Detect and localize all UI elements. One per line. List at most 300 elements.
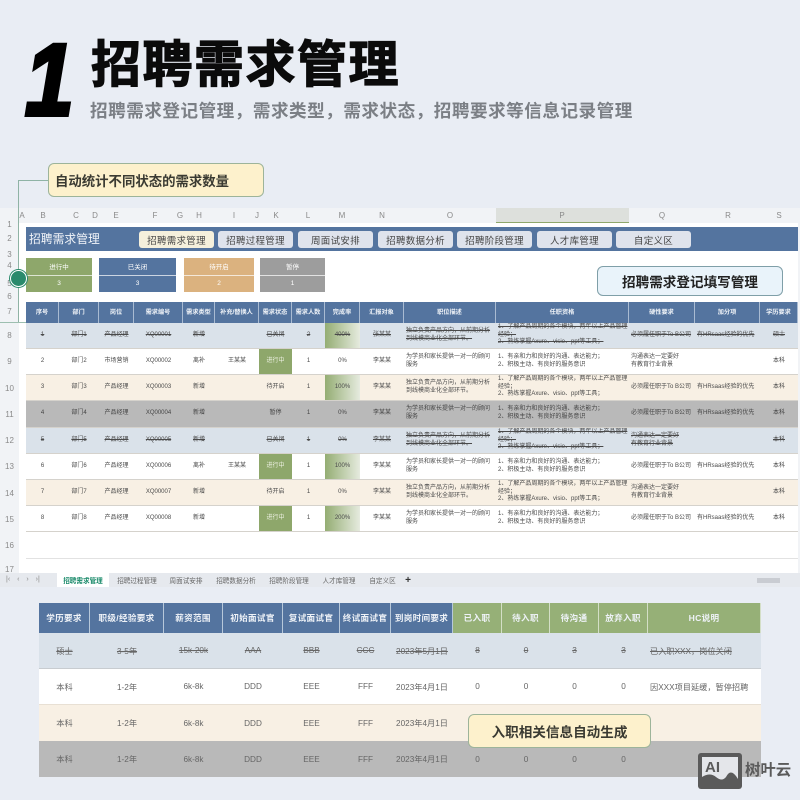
lower row 3: EEE: [303, 718, 320, 728]
row 7: 1、了解产品周期的各个模块，两年以上产品管理: [498, 481, 627, 487]
row 2: 1: [307, 358, 310, 364]
text: A: [19, 211, 25, 220]
row 3: 100%: [335, 384, 350, 390]
main table header: 序号: [36, 309, 48, 316]
row 5: 1: [307, 437, 310, 443]
row 3: 1: [307, 384, 310, 390]
row 2: 0%: [338, 358, 347, 364]
row 7: 0%: [338, 489, 347, 495]
stat card: closed: 3: [136, 280, 139, 287]
tab navigation arrows: |‹ ‹ › ›|: [6, 576, 40, 583]
text: H: [196, 211, 202, 220]
row 8: 必须履任职于To B公司: [631, 515, 691, 521]
lower row 2: [39, 669, 761, 705]
lower row 4: 6k-8k: [183, 754, 204, 764]
add tab icon: +: [405, 574, 411, 586]
text: 15: [5, 515, 14, 524]
row 6: 必须履任职于To B公司: [631, 463, 691, 469]
row 3: 产品经理: [104, 384, 128, 390]
row 1: 产品经理: [104, 332, 128, 338]
row 5: 新增: [193, 437, 205, 443]
row 1: 部门1: [71, 332, 87, 338]
connector bottom line: [0, 322, 26, 323]
lower row 3: 2023年4月1日: [396, 719, 448, 728]
row 7: 沟通表达一定要好: [631, 485, 679, 491]
main table header: 需求编号: [146, 309, 170, 316]
lower row 2: 因XXX项目延缓，暂停招聘: [650, 682, 748, 692]
numeral 1: 1: [25, 23, 74, 137]
lower row 1: 硕士: [56, 646, 73, 656]
text: N: [379, 211, 385, 220]
row 1: 新增: [193, 332, 205, 338]
lower row 4: EEE: [303, 754, 320, 764]
callout: onboarding info: 入职相关信息自动生成: [492, 725, 627, 740]
row 4: 0%: [338, 410, 347, 416]
row 6: 1: [307, 463, 310, 469]
row 5: 李某某: [373, 437, 391, 443]
main table header: 任职资格: [550, 309, 574, 316]
callout: registration: 招聘需求登记填写管理: [622, 275, 758, 290]
icon: AI picture: AI: [705, 759, 720, 776]
lower row 4: FFF: [358, 754, 373, 764]
stat card: pending: 2: [217, 280, 221, 287]
row 8: 服务: [406, 519, 418, 525]
row 3: 本科: [773, 384, 785, 390]
text: 9: [7, 357, 12, 366]
row 5: 0%: [338, 437, 347, 443]
row 5: 已关闭: [266, 437, 284, 443]
row 2: 为学员和家长提供一对一的顾问: [406, 354, 490, 360]
row 4: 4: [41, 410, 44, 416]
row 8: 李某某: [373, 515, 391, 521]
lower row 4: 0: [524, 754, 528, 764]
row 7: 1: [307, 489, 310, 495]
row 6: 2、积极主动、有良好的服务意识: [498, 467, 585, 473]
lower table header: 到岗时间要求: [395, 613, 448, 623]
text: M: [339, 211, 345, 220]
main table header: [26, 302, 798, 323]
sheet background: [19, 223, 798, 573]
row 3: 待开启: [266, 384, 284, 390]
row 6: XQ00006: [146, 463, 171, 469]
row 8: XQ00008: [146, 515, 171, 521]
lower row 1: 2023年5月1日: [396, 646, 448, 656]
lower row 2: 0: [621, 682, 626, 691]
row 8: 新增: [193, 515, 205, 521]
lower row 4: 0: [475, 754, 480, 764]
lower row 2: 2023年4月1日: [396, 682, 448, 692]
row 2: 李某某: [373, 358, 391, 364]
text: L: [306, 211, 310, 220]
row 4: XQ00004: [146, 410, 171, 416]
main table header: 岗位: [110, 309, 122, 316]
row 3: 独立负责产品方向，从前期分析: [406, 380, 490, 386]
row 6: 服务: [406, 467, 418, 473]
text: Q: [659, 211, 665, 220]
lower row 2: 0: [572, 682, 577, 691]
active tab: [57, 573, 109, 587]
watermark logo: [698, 753, 791, 789]
row 6: 6: [41, 463, 44, 469]
text: S: [776, 211, 782, 220]
lower table header: 初始面试官: [230, 613, 275, 623]
row 5: 本科: [773, 437, 785, 443]
active tab: 招聘需求管理: [63, 578, 103, 585]
row 4: 本科: [773, 410, 785, 416]
title: 招聘需求管理: [91, 37, 400, 93]
sheet title: 招聘需求管理: [29, 232, 100, 246]
row 7: 部门7: [71, 489, 87, 495]
lower row 3: 0: [572, 718, 577, 728]
row 1: [26, 323, 798, 349]
marker dot: [10, 270, 27, 287]
row 6: 为学员和家长提供一对一的顾问: [406, 459, 490, 465]
row 8: 本科: [773, 515, 785, 521]
brand name: 树叶云: [745, 762, 791, 779]
stat card: closed: 已关闭: [128, 264, 147, 271]
nav button: 周面试安排: [311, 236, 360, 246]
callout: auto stats: 自动统计不同状态的需求数量: [55, 174, 229, 189]
row 2: 2: [41, 358, 44, 364]
row 2: 本科: [773, 358, 785, 364]
row 4: 1: [307, 410, 310, 416]
text: 6: [7, 292, 12, 301]
row 3: 部门3: [71, 384, 87, 390]
stat card: pending: [184, 258, 254, 292]
main table header: 硬性要求: [649, 309, 674, 316]
text: 14: [5, 489, 14, 498]
row 3: 2、熟练掌握Axure、visio、ppt等工具；: [498, 391, 603, 397]
row 4: 2、积极主动、有良好的服务意识: [498, 414, 585, 420]
nav button: [616, 231, 691, 248]
text: R: [725, 211, 731, 220]
row 8: 部门8: [71, 515, 87, 521]
text: I: [233, 211, 235, 220]
nav button: [457, 231, 532, 248]
row 5: 5: [41, 437, 44, 443]
row 3: [26, 375, 798, 401]
lower table header: 终试面试官: [343, 613, 387, 623]
lower row 3: 0: [524, 718, 528, 728]
row 4: 部门4: [71, 410, 87, 416]
row 2: XQ00002: [146, 358, 171, 364]
row 3: 新增: [193, 384, 205, 390]
lower row 1: BBB: [303, 646, 320, 655]
row 4: 产品经理: [104, 410, 128, 416]
spreadsheet panel: [0, 208, 800, 587]
row 3: 必须履任职于To B公司: [631, 384, 691, 390]
text: 12: [5, 436, 14, 445]
row 6: 部门6: [71, 463, 87, 469]
text: 8: [7, 331, 12, 340]
row 6: 有HRsaas经验的优先: [697, 463, 754, 469]
lower row 1: 3: [621, 646, 626, 655]
lower row 3: 0: [475, 718, 480, 728]
row 4: [26, 401, 798, 428]
stat card: paused: 暂停: [286, 264, 299, 271]
row 3: 李某某: [373, 384, 391, 390]
row 7: 李某某: [373, 489, 391, 495]
row 4: 为学员和家长提供一对一的顾问: [406, 406, 490, 412]
row 1: 1: [41, 332, 44, 338]
lower table header: 职级/经验要求: [98, 613, 155, 623]
row 4: 暂停: [269, 410, 282, 416]
lower row 4: 0: [572, 754, 577, 764]
text: 5: [7, 279, 12, 288]
text: J: [255, 211, 259, 220]
lower row 2: 1-2年: [117, 682, 137, 692]
row 1: 1、了解产品周期的各个模块，两年以上产品管理: [498, 324, 627, 330]
row 6: 本科: [773, 463, 785, 469]
nav button: [537, 231, 612, 248]
text: C: [73, 211, 79, 220]
lower table header: 学历要求: [46, 613, 82, 623]
row 6: 100%: [335, 463, 350, 469]
subtitle: 招聘需求登记管理，需求类型，需求状态，招聘要求等信息记录管理: [90, 101, 633, 121]
row 1: 400%: [335, 332, 350, 338]
row 1: 必须履任职于To B公司: [631, 332, 691, 338]
lower table header: 待沟通: [561, 613, 587, 623]
nav button: [218, 231, 293, 248]
row 2: 服务: [406, 362, 418, 368]
text: 2: [7, 234, 12, 243]
nav button active: [139, 231, 214, 248]
lower row 1: AAA: [245, 646, 261, 655]
row 8: 8: [41, 515, 44, 521]
row 8: 200%: [335, 515, 350, 521]
row 8: 为学员和家长提供一对一的顾问: [406, 511, 490, 517]
stat card: paused: [260, 258, 325, 292]
row 5: 沟通表达一定要好: [631, 433, 679, 439]
text: 3: [7, 250, 12, 259]
text: 1: [7, 220, 12, 229]
row 3: 3: [41, 384, 44, 390]
row 3: XQ00003: [146, 384, 171, 390]
row 7: 经验；: [498, 489, 516, 495]
row 7: 产品经理: [104, 489, 128, 495]
text: 17: [5, 565, 14, 574]
row 3: 有HRsaas经验的优先: [697, 384, 754, 390]
row 7: 有教育行业背景: [631, 493, 673, 499]
text: D: [92, 211, 98, 220]
scrollbar: [757, 578, 780, 583]
tab: 人才库管理: [323, 578, 355, 585]
row 7: 2、熟练掌握Axure、visio、ppt等工具；: [498, 496, 603, 502]
row 1: 经验；: [498, 332, 516, 338]
row 4: 1、有亲和力和良好的沟通、表达能力；: [498, 406, 603, 412]
lower row 1: CCC: [357, 646, 374, 655]
stat card: in progress: 3: [57, 280, 61, 287]
lower row 3: 1-2年: [117, 719, 137, 728]
row 8: 有HRsaas经验的优先: [697, 515, 754, 521]
main table header: 部门: [72, 309, 85, 316]
tab: 自定义区: [369, 578, 396, 585]
row 6: 1、有亲和力和良好的沟通、表达能力；: [498, 459, 603, 465]
row 6: [26, 454, 798, 480]
lower row 3: 6k-8k: [183, 718, 204, 728]
stat card: paused: 1: [291, 280, 294, 287]
row 8: 1、有亲和力和良好的沟通、表达能力；: [498, 511, 603, 517]
text: 16: [5, 541, 14, 550]
nav button: 招聘过程管理: [226, 236, 285, 246]
lower row 2: 6k-8k: [183, 682, 204, 691]
lower row 1: 3: [572, 646, 577, 655]
main table header: 职位描述: [437, 309, 462, 316]
nav button: [298, 231, 373, 248]
text: F: [153, 211, 157, 220]
row 8: 产品经理: [104, 515, 128, 521]
row 3: 经验；: [498, 384, 516, 390]
lower row 4: 2023年4月1日: [396, 755, 448, 764]
lower table header: 已入职: [464, 613, 490, 623]
lower row 1: 已入职XXX，岗位关闭: [650, 646, 732, 656]
row 4: 李某某: [373, 410, 391, 416]
lower row 3: 0: [621, 718, 626, 728]
nav button: 招聘阶段管理: [465, 236, 524, 246]
callout: auto stats: [48, 163, 264, 197]
tab: 周面试安排: [170, 578, 202, 585]
row 2: [26, 349, 798, 375]
main table header: 汇报对象: [369, 309, 394, 316]
row 1: 有HRsaas经验的优先: [697, 332, 754, 338]
row 2: 1、有亲和力和良好的沟通、表达能力；: [498, 354, 603, 360]
row 2: 有教育行业背景: [631, 362, 673, 368]
main table header: 补充/替换人: [220, 309, 253, 316]
row 7: 7: [41, 489, 44, 495]
text: O: [447, 211, 453, 220]
row 7: 新增: [193, 489, 205, 495]
lower row 3: [39, 705, 761, 741]
row 4: 有HRsaas经验的优先: [697, 410, 754, 416]
text: 4: [7, 261, 12, 270]
lower table header: 薪资范围: [175, 613, 211, 623]
lower row 3: FFF: [358, 718, 373, 728]
row 7: 本科: [773, 489, 785, 495]
row 5: 经验；: [498, 437, 516, 443]
text: 10: [5, 384, 14, 393]
row 5: 到线模商业化全部环节。: [406, 441, 472, 447]
row 7: 到线模商业化全部环节。: [406, 493, 472, 499]
lower row 2: DDD: [244, 682, 262, 691]
row 2: 部门2: [71, 358, 87, 364]
row 6: 王某某: [228, 463, 246, 469]
lower row 1: 0: [524, 646, 528, 655]
lower row 2: 0: [524, 682, 528, 691]
lower table header: 待入职: [512, 613, 539, 623]
lower row 3: DDD: [244, 718, 262, 728]
stat card: in progress: 进行中: [49, 264, 69, 271]
callout: registration: [597, 266, 783, 296]
row 8: 1: [307, 515, 310, 521]
lower table header: 复试面试官: [289, 613, 333, 623]
row 2: 离补: [193, 358, 205, 364]
row 3: 到线模商业化全部环节。: [406, 388, 472, 394]
lower row 4: 本科: [56, 755, 73, 764]
text: 7: [7, 307, 12, 316]
row 5: 独立负责产品方向，从前期分析: [406, 433, 490, 439]
row 5: 有教育行业背景: [631, 441, 673, 447]
text: 13: [5, 462, 14, 471]
lower row 4: 1-2年: [117, 755, 137, 764]
main table header: 需求状态: [263, 309, 287, 316]
row 1: 独立负责产品方向，从前期分析: [406, 328, 490, 334]
text: G: [177, 211, 183, 220]
icon: AI picture: [698, 753, 742, 789]
lower row 4: 0: [621, 754, 626, 764]
nav button: 招聘数据分析: [386, 236, 445, 246]
row 1: 2、熟练掌握Axure、visio、ppt等工具；: [498, 339, 603, 345]
text: K: [273, 211, 279, 220]
tab: 招聘数据分析: [216, 578, 256, 585]
main table header: 需求类型: [186, 309, 211, 316]
stat card: pending: 待开启: [209, 264, 229, 271]
lower row 1: 8: [475, 646, 480, 655]
tab: 招聘过程管理: [117, 578, 157, 585]
row 8: 2、积极主动、有良好的服务意识: [498, 519, 585, 525]
row 7: 独立负责产品方向，从前期分析: [406, 485, 490, 491]
lower row 4: [39, 741, 761, 777]
lower row 1: [39, 633, 761, 669]
row 2: 沟通表达一定要好: [631, 354, 679, 360]
main table header: 加分项: [718, 309, 736, 316]
lower row 2: 本科: [56, 682, 73, 692]
sheet header bar: [26, 227, 798, 251]
row 5: [26, 428, 798, 454]
main table header: 学历要求: [766, 309, 791, 316]
row 7: [26, 480, 798, 506]
row 6: 李某某: [373, 463, 391, 469]
row 1: 到线模商业化全部环节。: [406, 336, 472, 342]
row 5: 产品经理: [104, 437, 128, 443]
nav button active: 招聘需求管理: [147, 236, 206, 246]
row 8: 进行中: [266, 515, 284, 521]
row 8: [26, 506, 798, 532]
text: E: [113, 211, 119, 220]
lower table header: 放弃入职: [605, 613, 641, 623]
row 6: 离补: [193, 463, 205, 469]
row 6: 产品经理: [104, 463, 128, 469]
row 7: XQ00007: [146, 489, 171, 495]
row 1: XQ00001: [146, 332, 171, 338]
row 5: 部门5: [71, 437, 87, 443]
row 6: 进行中: [266, 463, 284, 469]
row 2: 进行中: [266, 358, 284, 364]
lower row 2: FFF: [358, 682, 373, 691]
row 1: 张某某: [373, 332, 391, 338]
connector line: [18, 180, 49, 322]
row 1: 硕士: [773, 332, 785, 338]
sheet tab bar: [0, 573, 800, 587]
nav button: [378, 231, 453, 248]
empty row line: [26, 558, 798, 559]
text: B: [40, 211, 46, 220]
row 5: 2、熟练掌握Axure、visio、ppt等工具；: [498, 444, 603, 450]
row 5: 1、了解产品周期的各个模块，两年以上产品管理: [498, 429, 627, 435]
lower table header: [39, 603, 761, 633]
nav button: 人才库管理: [550, 236, 599, 246]
row 1: 已关闭: [266, 332, 284, 338]
row 4: 新增: [193, 410, 205, 416]
lower row 2: 0: [475, 682, 480, 691]
lower row 1: 3-5年: [117, 646, 137, 656]
stat card: closed: [99, 258, 176, 292]
row 2: 2、积极主动、有良好的服务意识: [498, 362, 585, 368]
lower row 4: DDD: [244, 754, 262, 764]
lower row 2: EEE: [303, 682, 320, 691]
callout: onboarding info: [468, 714, 651, 748]
main table header: 完成率: [333, 309, 351, 316]
text: P: [559, 211, 565, 220]
